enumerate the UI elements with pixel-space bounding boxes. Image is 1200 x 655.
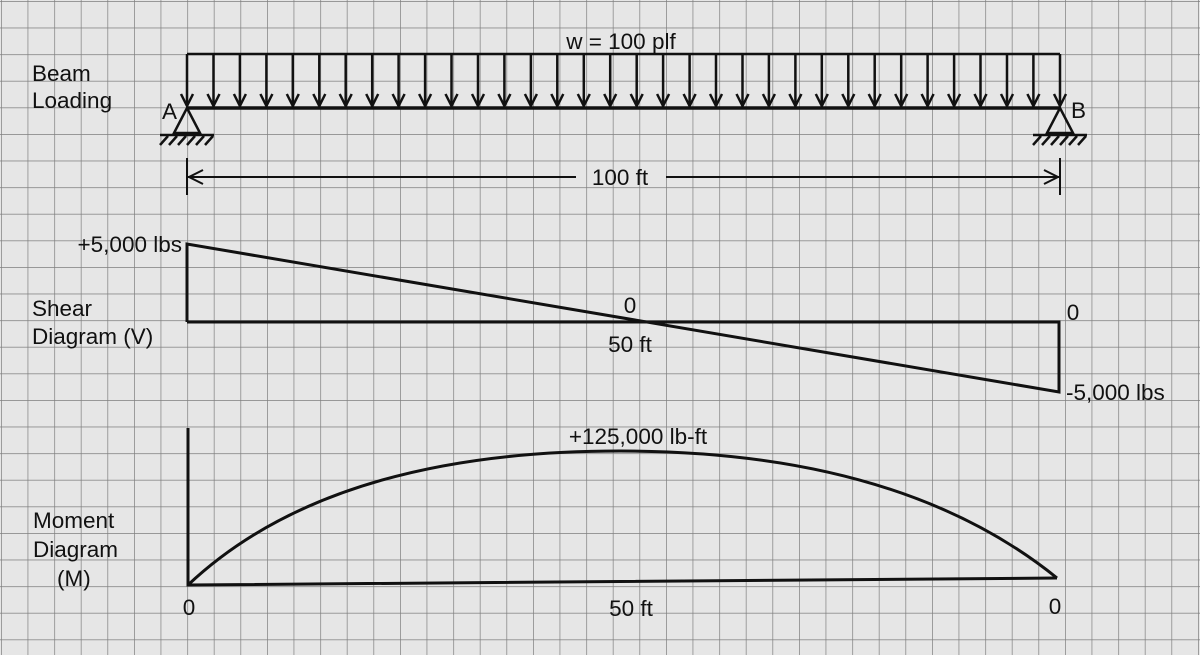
label: beam loading [32, 61, 112, 113]
shear diagram: -5,000 lbs [1066, 380, 1165, 405]
shear diagram [78, 232, 1165, 405]
label: beam loading: Loading [32, 88, 112, 113]
support A [160, 108, 214, 145]
load title: w = 100 plf [565, 29, 676, 54]
label: moment diagram: Moment [33, 508, 115, 533]
beam [187, 106, 1060, 110]
beam loading diagram [160, 29, 1087, 195]
shear diagram: 50 ft [608, 332, 653, 357]
label: shear diagram [32, 296, 153, 349]
label: beam loading: Beam [32, 61, 91, 86]
label: moment diagram [33, 508, 118, 591]
label: shear diagram: Shear [32, 296, 93, 321]
beam loading diagram: B [1071, 98, 1086, 123]
label: shear diagram: Diagram (V) [32, 324, 153, 349]
dimension line [187, 158, 1060, 195]
moment diagram: +125,000 lb-ft [569, 424, 708, 449]
support B [1033, 108, 1087, 145]
label: moment diagram: (M) [57, 566, 91, 591]
beam loading diagram: A [162, 99, 177, 124]
shear diagram: 0 [1067, 300, 1079, 325]
beam loading diagram: 100 ft [592, 165, 649, 190]
moment diagram: 0 [1049, 594, 1061, 619]
moment diagram: 50 ft [609, 596, 654, 621]
moment diagram: 0 [183, 595, 195, 620]
shear diagram: +5,000 lbs [78, 232, 182, 257]
distributed load [181, 54, 1066, 106]
moment diagram [183, 424, 1061, 621]
shear diagram: 0 [624, 293, 636, 318]
label: moment diagram: Diagram [33, 537, 118, 562]
